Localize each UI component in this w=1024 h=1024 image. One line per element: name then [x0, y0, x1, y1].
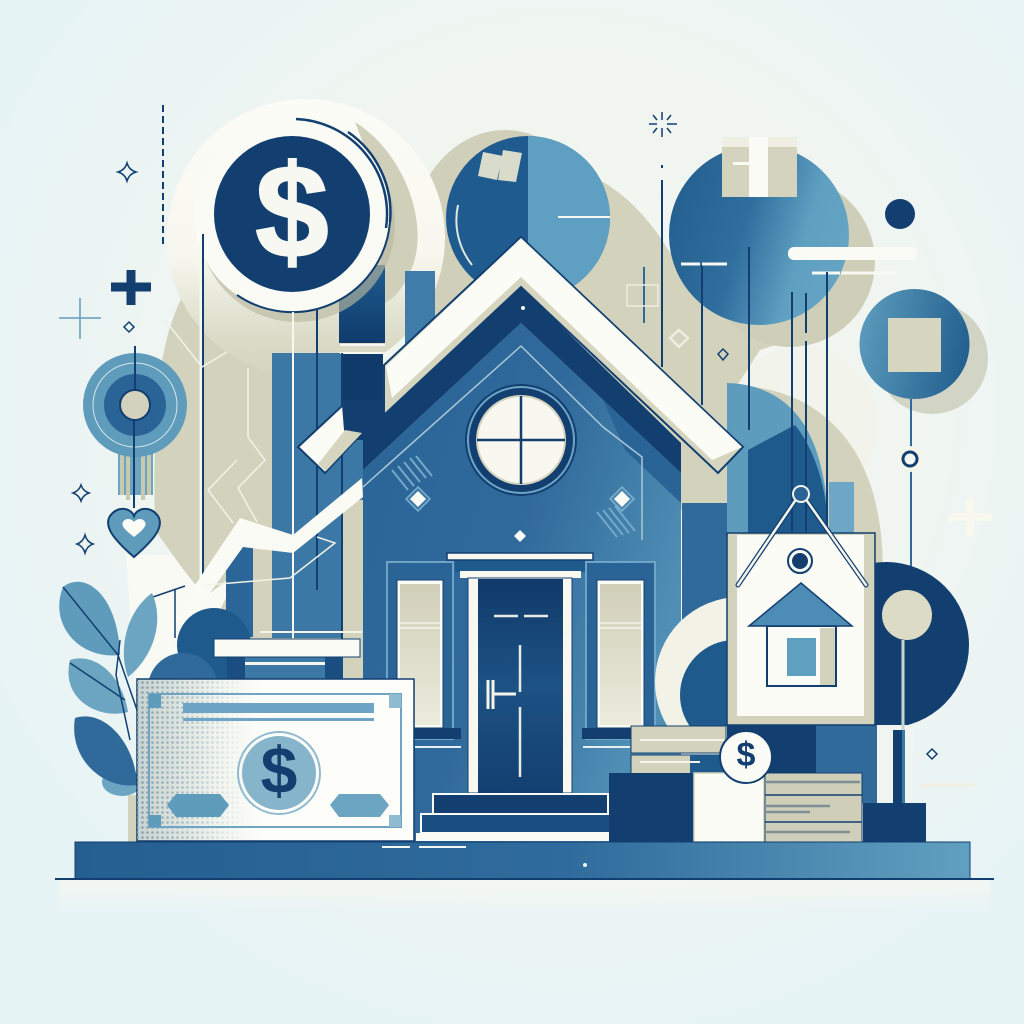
ground platform — [55, 842, 994, 912]
banknote — [137, 679, 414, 841]
large dollar coin: $ — [255, 138, 329, 285]
roof — [298, 237, 743, 473]
wall sparkles — [392, 456, 635, 542]
right dark tree — [727, 562, 969, 803]
large dollar coin — [194, 116, 395, 322]
small dollar coin: $ — [737, 736, 756, 774]
small dollar coin — [720, 731, 772, 783]
square in circle right — [860, 289, 988, 414]
house walls — [343, 287, 681, 842]
back bars — [226, 265, 435, 638]
banknote: $ — [261, 733, 297, 807]
pedestal behind banknote — [214, 632, 362, 681]
half blue circle — [446, 136, 610, 300]
left target medallion — [83, 346, 187, 508]
white fan behind growth arrow — [126, 555, 240, 680]
beige crescent behind coin — [355, 122, 418, 306]
large blue circle with box — [669, 137, 849, 325]
price tag with house — [727, 486, 875, 725]
round window — [465, 384, 577, 496]
growth arrow — [153, 320, 363, 673]
beige backdrop shapes — [128, 130, 883, 842]
small sparkles — [73, 112, 937, 759]
right back panels — [682, 383, 854, 653]
hanging lines — [163, 105, 911, 640]
plus signs — [59, 270, 992, 785]
windows — [385, 562, 657, 747]
white arch and dark arch behind tag — [655, 598, 727, 726]
steps — [416, 794, 623, 841]
white bar and navy dot — [788, 199, 917, 273]
pale disc behind coin — [167, 99, 445, 377]
money stacks — [609, 726, 926, 842]
right node on line — [897, 446, 923, 472]
door — [447, 553, 593, 793]
icon: heart pendant — [108, 509, 160, 557]
illustration: house and finance — [55, 99, 994, 888]
plant left — [59, 582, 251, 796]
